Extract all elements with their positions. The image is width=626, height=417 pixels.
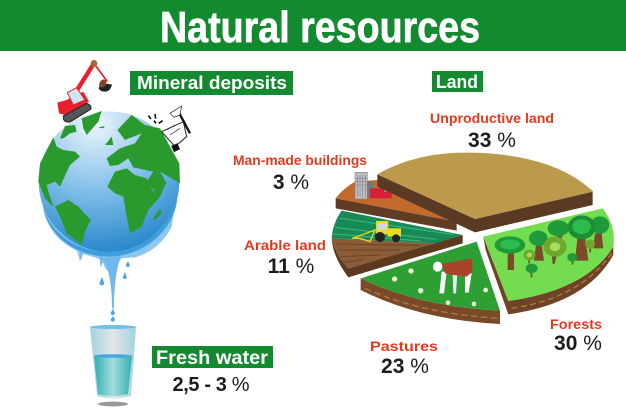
label and value: arable land: Arable land [244,237,326,253]
label and value: forests [550,316,602,355]
label: land: Land [436,71,478,92]
icon: oil pump [148,106,190,152]
icon: factory [355,172,398,199]
landmasses [38,111,180,245]
label and value: pastures: Pastures [370,338,438,354]
pie slice: forests [483,208,614,314]
icon: globe with dripping water [38,60,190,270]
pie slice: arable land [332,211,463,277]
label and value: pastures [370,338,438,378]
icon: cow [433,258,473,293]
label and value: arable land: 11 % [268,255,314,278]
label and value: man-made buildings [233,152,367,194]
label and value: forests: Forests [550,316,602,332]
value: fresh water: 2,5 - 3 % [172,374,250,396]
label: mineral deposits: Mineral deposits [137,72,287,93]
title banner: Natural resources [160,3,480,52]
label and value: man-made buildings: Man-made buildings [233,152,367,168]
pie slice: unproductive land [377,153,593,232]
label and value: man-made buildings: 3 % [273,171,309,194]
pie slice: man-made buildings [336,172,457,231]
icon: water drip and drops [80,252,130,322]
title banner [0,0,626,52]
label and value: unproductive land: 33 % [468,129,516,152]
label and value: unproductive land [430,110,554,152]
label and value: arable land [244,237,326,278]
pie slice: pastures [361,242,500,324]
label and value: unproductive land: Unproductive land [430,110,554,126]
icon: tractor [352,221,401,242]
icon: excavator [57,60,112,122]
icon: glass of water [90,325,136,406]
flowers [392,268,488,306]
trees [495,215,609,277]
label and value: pastures: 23 % [381,355,429,378]
label: fresh water: Fresh water [156,347,268,369]
label and value: forests: 30 % [554,332,602,355]
pie chart: land use [332,153,614,324]
